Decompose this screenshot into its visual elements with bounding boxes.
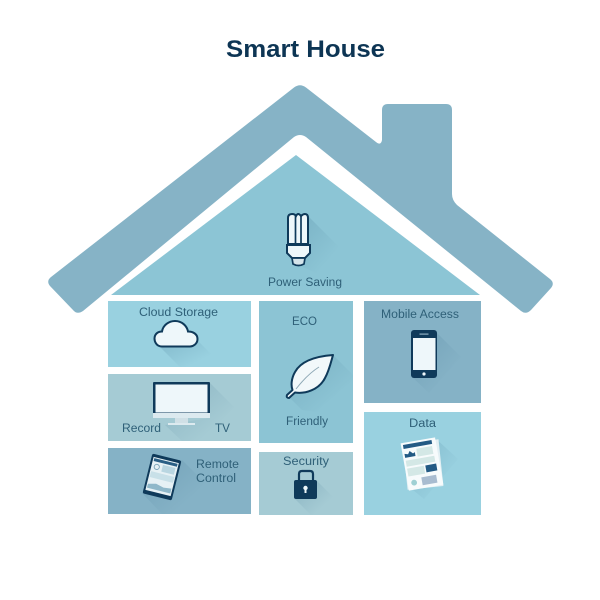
label: Friendly xyxy=(286,416,328,428)
icon: tablet xyxy=(142,453,182,501)
attic triangle xyxy=(111,155,480,295)
label: Cloud Storage xyxy=(139,307,218,319)
label: Data xyxy=(409,418,437,430)
icon shadow: padlock xyxy=(295,481,333,515)
icon: monitor xyxy=(153,382,210,425)
panel: cloud storage xyxy=(108,301,251,367)
panel: security xyxy=(259,452,353,515)
label: Remote xyxy=(196,459,239,471)
panel background xyxy=(259,301,353,443)
icon shadow: tablet xyxy=(142,460,205,514)
icon shadow: cloud xyxy=(160,340,215,367)
panel: data xyxy=(364,412,481,515)
label: ECO xyxy=(292,316,317,328)
label: TV xyxy=(215,423,230,435)
label: Control xyxy=(196,473,236,485)
panel: record tv xyxy=(108,374,251,441)
title: Smart House xyxy=(226,36,385,63)
icon shadow: monitor xyxy=(165,383,234,441)
panel: power saving xyxy=(111,155,480,295)
icon shadow: bulb xyxy=(292,216,342,274)
icon shadow: phone xyxy=(411,333,461,393)
icon: leaf xyxy=(287,355,333,398)
roof with chimney xyxy=(48,85,553,313)
icon: phone xyxy=(411,330,437,378)
panel background xyxy=(259,452,353,515)
icon: cloud xyxy=(154,321,198,346)
icon shadow: leaf xyxy=(288,355,353,412)
panel background xyxy=(108,374,251,441)
icon: light bulb xyxy=(287,214,310,266)
panel background xyxy=(364,301,481,403)
label: Power Saving xyxy=(268,277,342,289)
panel: mobile access xyxy=(364,301,481,403)
icon shadow: document xyxy=(413,437,458,499)
label: Mobile Access xyxy=(381,309,459,321)
panel: eco friendly xyxy=(259,301,353,443)
icon: padlock xyxy=(294,471,317,499)
panel background xyxy=(108,301,251,367)
panel background xyxy=(108,448,251,514)
label: Record xyxy=(122,423,161,435)
label: Security xyxy=(283,456,329,468)
icon: document xyxy=(401,437,443,491)
panel background xyxy=(364,412,481,515)
panel: remote control xyxy=(108,448,251,514)
